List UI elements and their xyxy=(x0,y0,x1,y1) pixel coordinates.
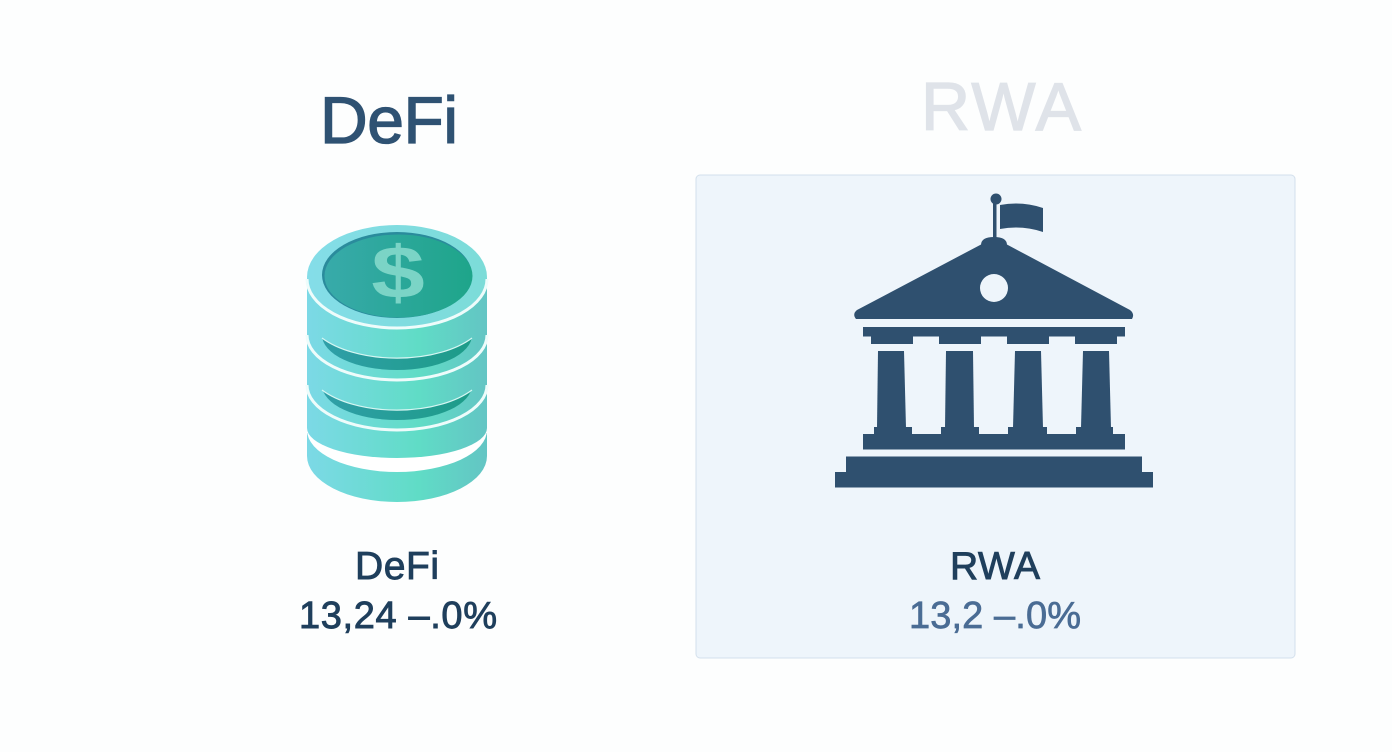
label: DeFi: DeFi xyxy=(355,545,439,588)
value: RWA: 13,2 –.0% xyxy=(909,595,1081,637)
heading: DeFi: DeFi xyxy=(320,83,458,157)
label: RWA: RWA xyxy=(950,545,1040,588)
value: DeFi: 13,24 –.0% xyxy=(299,595,497,637)
heading: RWA (faded): RWA xyxy=(921,69,1082,145)
icon: stack of coins: $ xyxy=(371,232,425,314)
icon: stack of coins xyxy=(307,225,487,502)
panel: RWA xyxy=(696,175,1295,658)
icon: bank building xyxy=(835,194,1153,488)
